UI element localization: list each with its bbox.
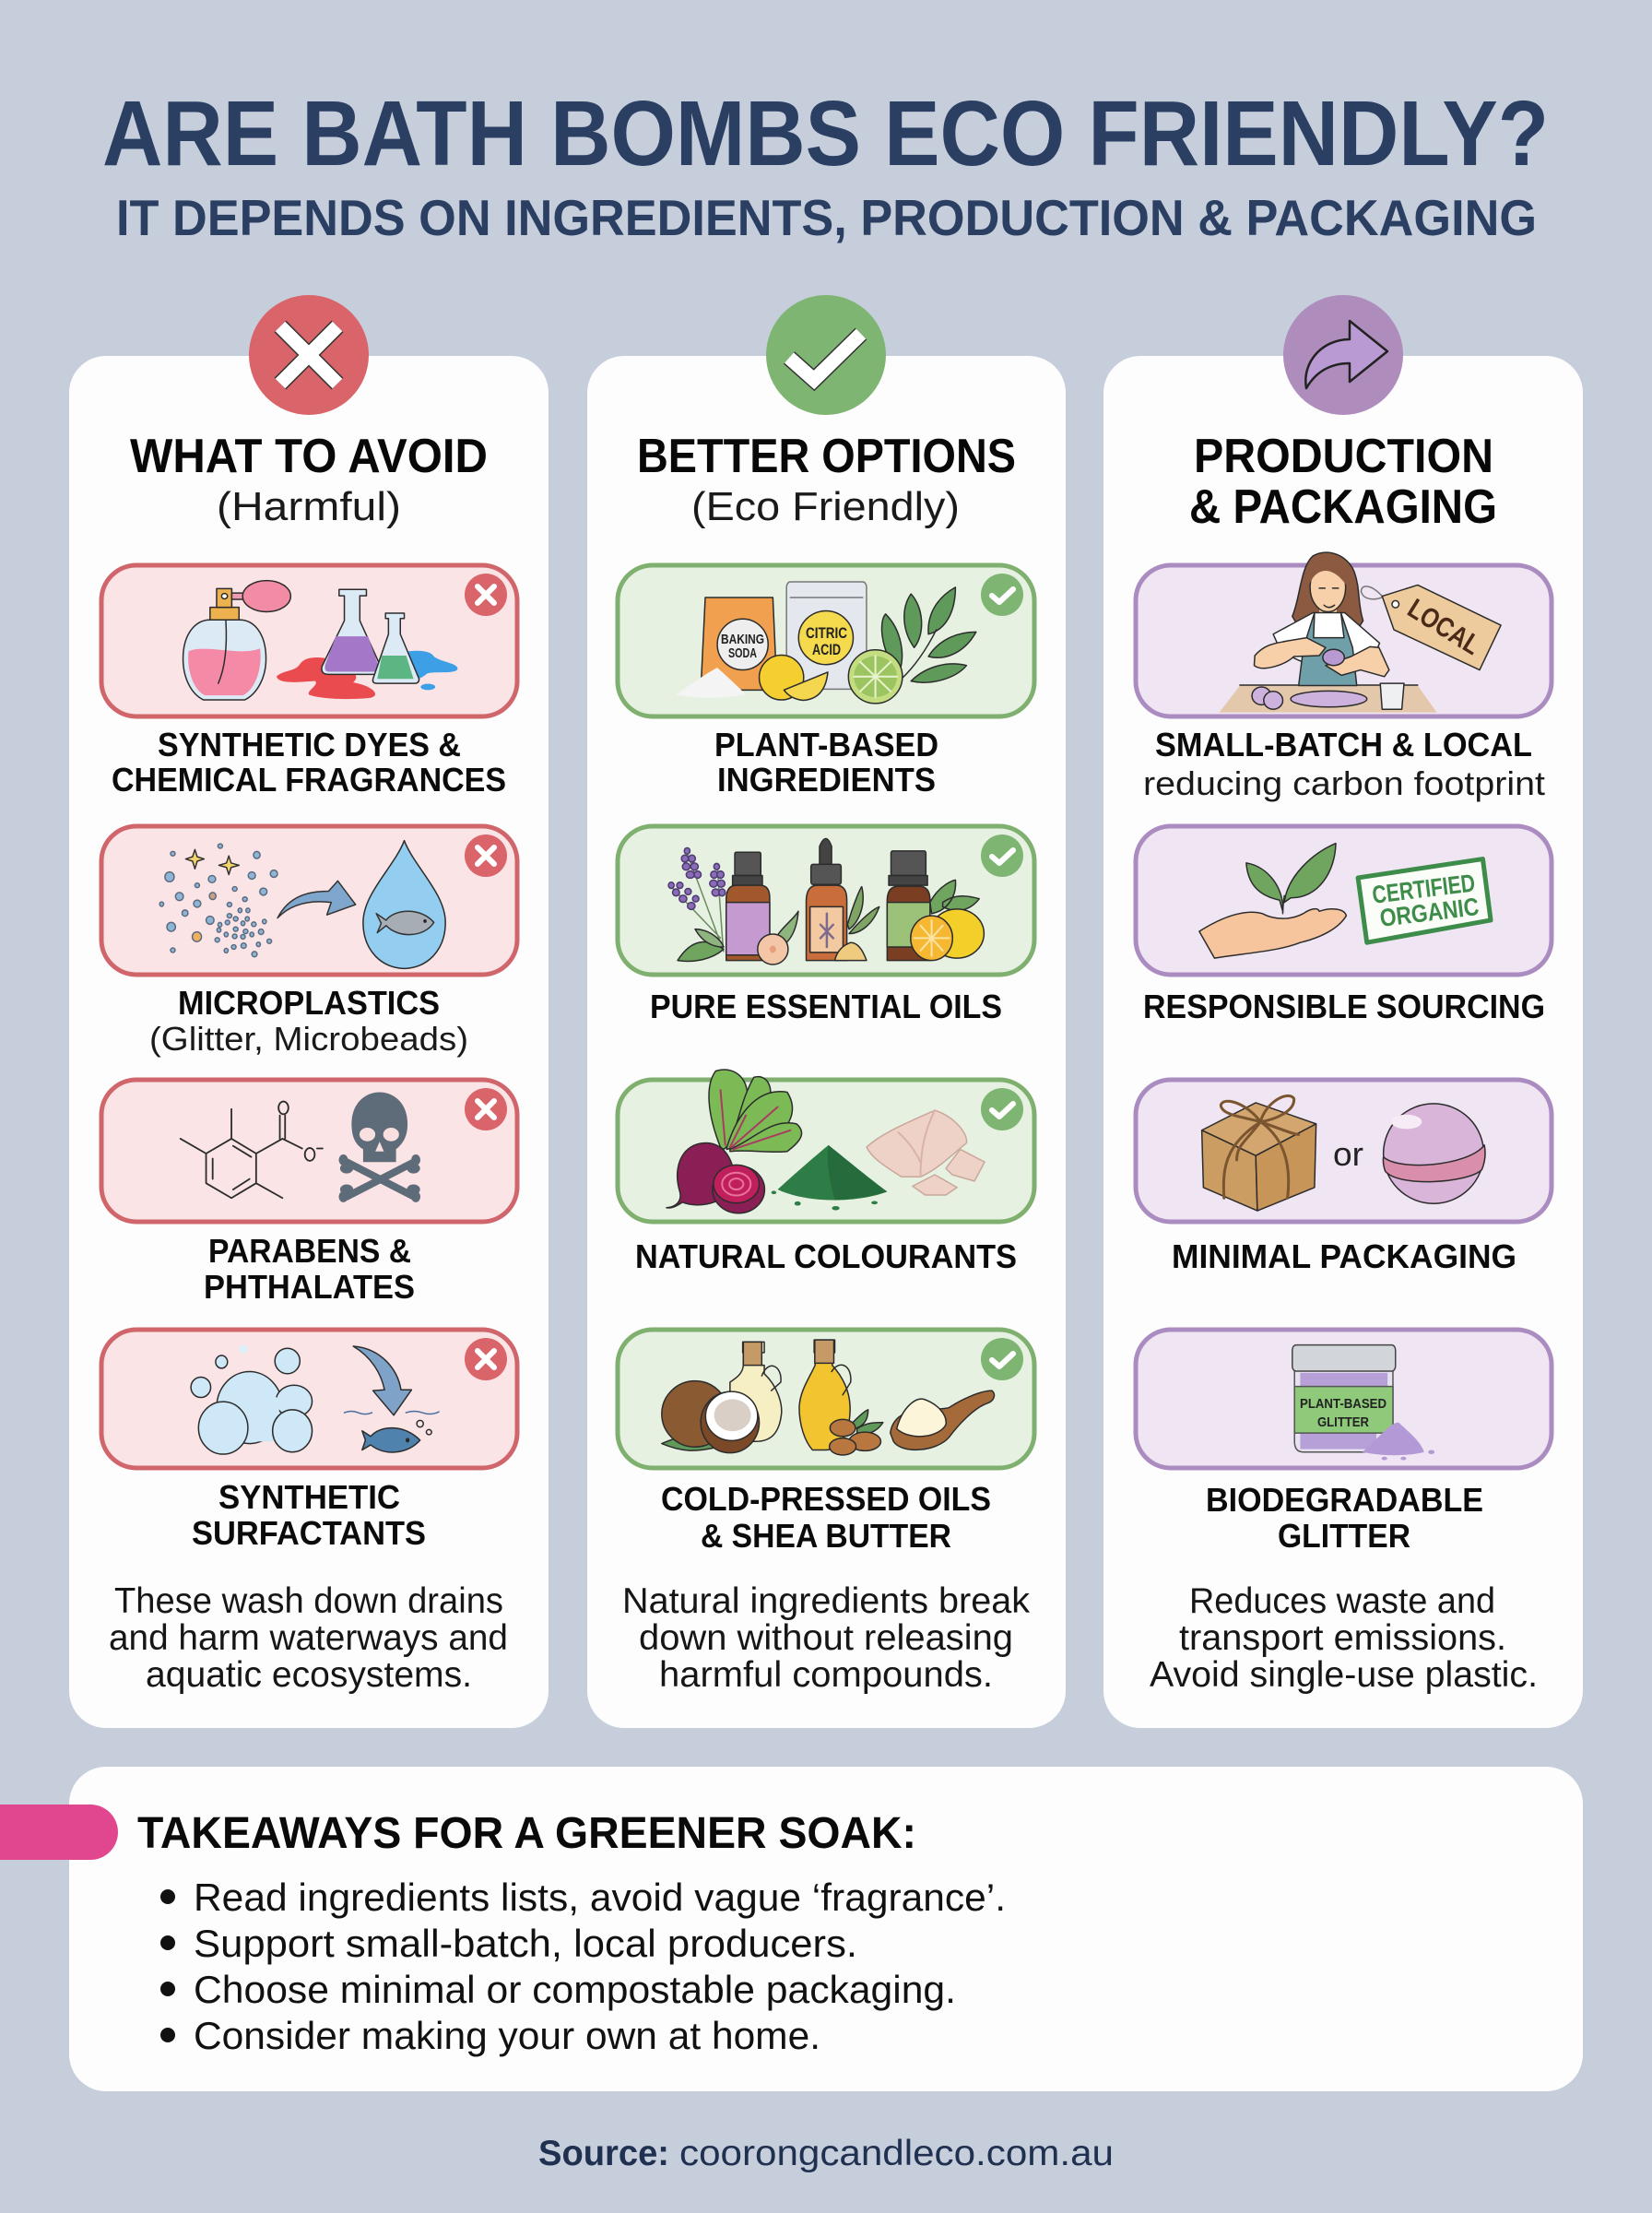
text: certified organic stamp: CERTIFIED bbox=[1371, 869, 1477, 909]
panel heading: (Eco Friendly) bbox=[691, 484, 960, 529]
icon: woman making bath bombs with local tag bbox=[1220, 552, 1501, 713]
card: biodegradable glitter bbox=[1136, 1330, 1552, 1468]
label: responsible sourcing: RESPONSIBLE SOURCING bbox=[1143, 988, 1545, 1025]
panel: production and packaging bbox=[1103, 295, 1583, 1728]
paragraph: harm to waterways: and harm waterways and bbox=[109, 1618, 508, 1658]
paragraph: harm to waterways: These wash down drains bbox=[114, 1581, 503, 1621]
card: parabens bbox=[101, 1080, 517, 1222]
source line: coorongcandleco.com.au bbox=[679, 2134, 1114, 2173]
label: plant-based ingredients: PLANT-BASED bbox=[714, 726, 938, 763]
text: jar label: PLANT-BASED bbox=[1300, 1396, 1386, 1412]
bullet list: Consider making your own at home. bbox=[194, 2014, 820, 2057]
icon: small cross bbox=[465, 1338, 507, 1380]
panel heading bbox=[637, 430, 1016, 529]
text: pack labels: ACID bbox=[812, 641, 841, 658]
panel heading: (Harmful) bbox=[217, 484, 401, 529]
icon: small cross bbox=[465, 574, 507, 616]
card: responsible sourcing bbox=[1136, 826, 1552, 975]
label: synthetic dyes and chemical fragrances bbox=[112, 726, 506, 799]
paragraph: harm to waterways bbox=[109, 1581, 508, 1695]
paragraph: natural ingredients: down without releasing bbox=[639, 1618, 1013, 1658]
text: local tag: LOCAL bbox=[1402, 593, 1485, 661]
paragraph: harm to waterways: aquatic ecosystems. bbox=[146, 1655, 472, 1695]
icon: small cross bbox=[465, 834, 507, 877]
text: or: or bbox=[1333, 1135, 1363, 1173]
icon: perfume and flasks bbox=[183, 581, 457, 700]
icon: beetroot, green powder, pink clay bbox=[667, 1070, 985, 1213]
panel heading bbox=[1189, 430, 1497, 534]
bullet list: Support small-batch, local producers. bbox=[194, 1922, 857, 1965]
text: jar label bbox=[1300, 1396, 1386, 1430]
source line: Source: bbox=[538, 2134, 669, 2173]
text: pack labels bbox=[721, 624, 847, 661]
label: cold-pressed oils and shea butter bbox=[661, 1480, 991, 1555]
label: small-batch and local: reducing carbon footprint bbox=[1143, 764, 1545, 802]
label: microplastics bbox=[149, 984, 468, 1058]
text: pack labels: BAKING bbox=[721, 632, 764, 647]
label: synthetic surfactants: SYNTHETIC bbox=[218, 1478, 400, 1516]
label: plant-based ingredients bbox=[714, 726, 938, 799]
card: minimal packaging bbox=[1136, 1080, 1552, 1222]
label: parabens and phthalates: PHTHALATES bbox=[204, 1268, 415, 1306]
icon: coconut, oils, almonds, shea butter bbox=[662, 1340, 994, 1455]
label: synthetic dyes and chemical fragrances: SYNTHETIC DYES & bbox=[158, 726, 461, 763]
icon: wrapped parcel or bath bomb bbox=[1202, 1095, 1485, 1211]
label: plant-based ingredients: INGREDIENTS bbox=[717, 761, 936, 799]
source line bbox=[538, 2134, 1114, 2173]
card: microplastics bbox=[101, 826, 517, 975]
label: biodegradable glitter bbox=[1206, 1481, 1483, 1555]
icon: bottles with lavender and lemon bbox=[668, 839, 984, 964]
text: pack labels: CITRIC bbox=[806, 624, 847, 642]
label: minimal packaging: MINIMAL PACKAGING bbox=[1172, 1237, 1516, 1275]
label: synthetic dyes and chemical fragrances: CHEMICAL FRAGRANCES bbox=[112, 761, 506, 799]
bullet list bbox=[160, 1876, 1006, 2057]
card: cold-pressed oils bbox=[618, 1330, 1034, 1468]
panel: better options bbox=[587, 295, 1066, 1728]
bullet list: Choose minimal or compostable packaging. bbox=[194, 1968, 956, 2011]
label: parabens and phthalates bbox=[204, 1232, 415, 1306]
icon: small check bbox=[981, 1338, 1023, 1380]
panel heading: WHAT TO AVOID bbox=[130, 430, 488, 483]
icon: small check bbox=[981, 834, 1023, 877]
takeaways heading: TAKEAWAYS FOR A GREENER SOAK: bbox=[137, 1809, 916, 1858]
label: biodegradable glitter: GLITTER bbox=[1278, 1517, 1410, 1555]
label: synthetic surfactants bbox=[192, 1478, 426, 1552]
label: microplastics: (Glitter, Microbeads) bbox=[149, 1020, 468, 1058]
text: certified organic stamp bbox=[1371, 869, 1481, 933]
icon: microplastics flowing into water drop bbox=[159, 841, 445, 968]
paragraph: waste and emissions: transport emissions. bbox=[1179, 1618, 1506, 1658]
panel: what to avoid bbox=[69, 295, 549, 1728]
label: small-batch and local bbox=[1143, 726, 1545, 802]
card: small-batch and local bbox=[1136, 552, 1552, 716]
panel heading: BETTER OPTIONS bbox=[637, 430, 1016, 483]
label: cold-pressed oils and shea butter: COLD-PRESSED OILS bbox=[661, 1480, 991, 1518]
paragraph: waste and emissions: Reduces waste and bbox=[1189, 1581, 1495, 1621]
label: synthetic surfactants: SURFACTANTS bbox=[192, 1514, 426, 1552]
icon: red cross badge bbox=[249, 295, 369, 415]
card: surfactants bbox=[101, 1330, 517, 1468]
icon: hand, sprout and organic stamp bbox=[1199, 844, 1491, 958]
icon: molecule and skull bbox=[181, 1092, 420, 1202]
icon: small cross bbox=[465, 1088, 507, 1130]
text: jar label: GLITTER bbox=[1317, 1414, 1369, 1430]
label: pure essential oils: PURE ESSENTIAL OILS bbox=[650, 988, 1002, 1025]
paragraph: waste and emissions bbox=[1150, 1581, 1538, 1695]
icon: small check bbox=[981, 574, 1023, 616]
paragraph: natural ingredients bbox=[622, 1581, 1030, 1695]
label: biodegradable glitter: BIODEGRADABLE bbox=[1206, 1481, 1483, 1519]
icon: bubbles, arrow and fish bbox=[191, 1345, 439, 1454]
card: plant-based ingredients bbox=[618, 565, 1034, 716]
label: cold-pressed oils and shea butter: & SHEA BUTTER bbox=[701, 1517, 951, 1555]
icon: green check badge bbox=[766, 295, 886, 415]
icon: small check bbox=[981, 1088, 1023, 1130]
paragraph: waste and emissions: Avoid single-use plastic. bbox=[1150, 1655, 1538, 1695]
card: essential oils bbox=[618, 826, 1034, 975]
label: small-batch and local: SMALL-BATCH & LOCAL bbox=[1155, 726, 1532, 763]
bullet list: Read ingredients lists, avoid vague ‘fragrance’. bbox=[194, 1876, 1006, 1919]
panel: takeaways bbox=[0, 1767, 1583, 2091]
pink tab bbox=[0, 1805, 118, 1860]
panel heading: & PACKAGING bbox=[1189, 480, 1497, 534]
text: certified organic stamp: ORGANIC bbox=[1378, 893, 1481, 932]
card: natural colourants bbox=[618, 1070, 1034, 1222]
paragraph: natural ingredients: harmful compounds. bbox=[659, 1655, 993, 1695]
icon: purple arrow badge bbox=[1283, 295, 1403, 415]
card: synthetic dyes bbox=[101, 565, 517, 716]
panel heading bbox=[130, 430, 488, 529]
icon: baking soda, citric acid, citrus and leaves bbox=[676, 582, 976, 704]
label: natural colourants: NATURAL COLOURANTS bbox=[635, 1237, 1017, 1275]
label: parabens and phthalates: PARABENS & bbox=[208, 1232, 411, 1270]
subtitle: IT DEPENDS ON INGREDIENTS, PRODUCTION & PACKAGING bbox=[116, 189, 1537, 246]
paragraph: natural ingredients: Natural ingredients break bbox=[622, 1581, 1030, 1621]
icon: jar of plant-based glitter bbox=[1292, 1345, 1434, 1460]
text: pack labels: SODA bbox=[728, 645, 757, 661]
panel heading: PRODUCTION bbox=[1194, 430, 1493, 483]
label: microplastics: MICROPLASTICS bbox=[178, 984, 440, 1022]
